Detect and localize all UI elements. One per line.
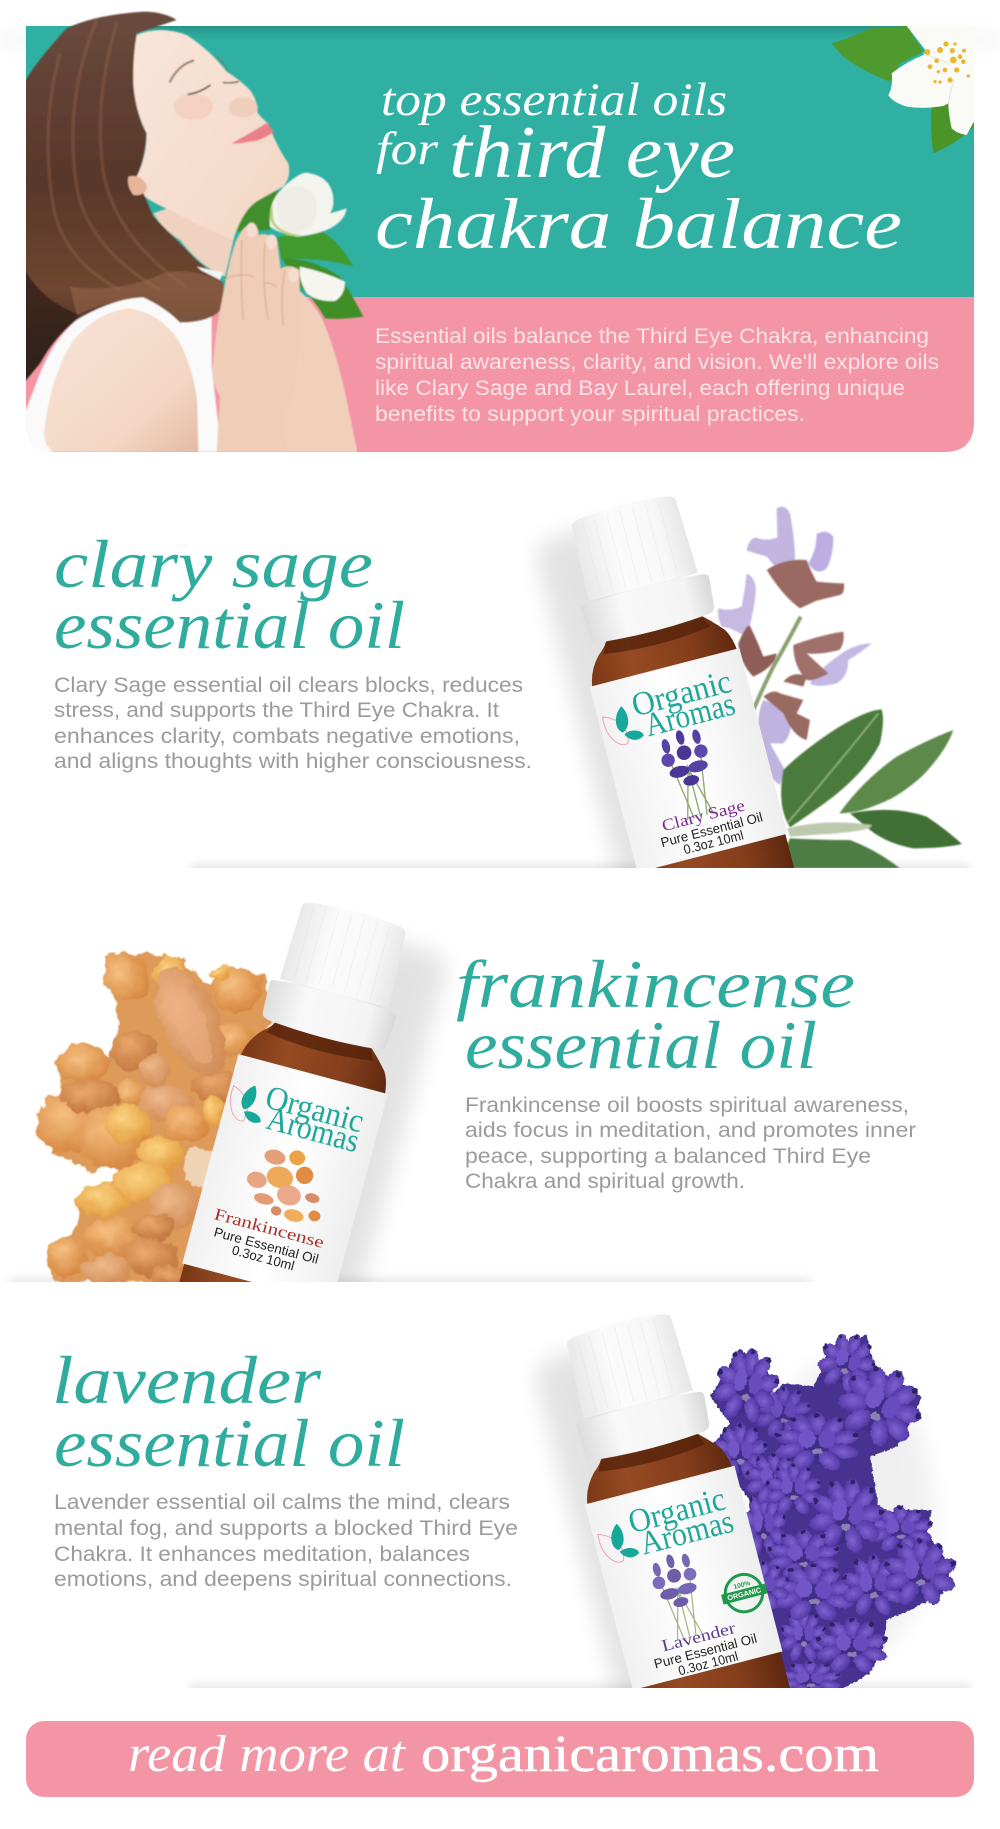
brand logo <box>602 706 644 746</box>
ear <box>128 176 147 195</box>
organic stamp: ORGANIC <box>726 1585 763 1603</box>
body text: frankincense: Frankincense oil boosts spiritual awareness, <box>465 1094 909 1117</box>
brand name: Organic <box>262 1079 368 1140</box>
heading: clary sage essential oil <box>54 526 405 663</box>
lavender flower spikes <box>707 1324 959 1699</box>
brand name: Organic <box>625 1481 729 1541</box>
bottle: clary sage <box>572 496 794 868</box>
petals <box>888 26 977 135</box>
cheek blush <box>173 93 213 120</box>
title <box>375 74 902 264</box>
lavender illustration with bottle <box>531 1303 959 1750</box>
banner text: read more at <box>128 1726 407 1783</box>
brand logo <box>225 1080 269 1126</box>
plant: sage flowers and leaves <box>718 507 962 868</box>
fingernails <box>246 223 298 282</box>
heading: frankincense essential oil: essential oil <box>465 1007 817 1083</box>
panel outer shadow <box>0 28 1000 52</box>
jasmine flower, top right <box>832 26 977 153</box>
product name: Lavender <box>660 1618 738 1655</box>
soft shadow behind flowers <box>753 1360 933 1667</box>
heading: lavender essential oil <box>52 1342 405 1481</box>
brand name line two: Aromas <box>263 1100 363 1160</box>
body text: lavender: Lavender essential oil calms the mind, clears <box>54 1491 510 1514</box>
shadow beside bottle <box>216 918 450 1310</box>
intro paragraph: spiritual awareness, clarity, and vision. We'll explore oils <box>375 351 939 374</box>
clary sage illustration with bottle <box>533 496 962 868</box>
body text: clary sage: Clary Sage essential oil clears blocks, reduces <box>54 674 523 697</box>
body text: clary sage: enhances clarity, combats negative emotions, <box>54 725 520 748</box>
heading: clary sage essential oil: essential oil <box>54 587 405 663</box>
floor shadow <box>9 1276 811 1282</box>
banner text: organicaromas.com <box>421 1726 879 1783</box>
product name: Clary Sage <box>660 796 747 835</box>
intro paragraph: Essential oils balance the Third Eye Chakra, enhancing <box>375 325 929 348</box>
banner text <box>128 1726 879 1783</box>
product volume: 0.3oz 10ml <box>230 1242 296 1273</box>
body text: clary sage: stress, and supports the Third Eye Chakra. It <box>54 699 499 722</box>
product type: Pure Essential Oil <box>652 1631 759 1672</box>
heading: frankincense essential oil: frankincense <box>456 946 855 1022</box>
lips <box>232 123 274 143</box>
organic stamp: 100% <box>733 1580 751 1591</box>
section: lavender <box>52 1303 970 1750</box>
heading: frankincense essential oil <box>456 946 855 1083</box>
brand name line two: Aromas <box>641 685 739 744</box>
section: clary sage <box>54 496 971 868</box>
brand name line two: Aromas <box>636 1503 737 1562</box>
floor shadow <box>190 1686 970 1694</box>
body text: lavender: emotions, and deepens spiritual connections. <box>54 1568 512 1591</box>
right arm <box>253 290 357 452</box>
product name: Frankincense <box>212 1204 326 1252</box>
lavender sprig on label <box>661 730 714 820</box>
intro paragraph <box>375 325 939 426</box>
lavender sprig on label <box>647 1549 711 1642</box>
leaves and buds behind the hand <box>237 173 363 319</box>
shadow behind bottle <box>531 1330 752 1718</box>
body text: lavender: mental fog, and supports a blocked Third Eye <box>54 1517 518 1540</box>
body text: frankincense: aids focus in meditation, and promotes inner <box>465 1119 916 1142</box>
bottle: frankincense <box>173 892 431 1339</box>
section: frankincense <box>9 902 916 1282</box>
neck <box>153 192 273 277</box>
body text: clary sage <box>54 674 532 773</box>
body text: lavender <box>54 1491 518 1591</box>
shadow behind bottle <box>533 528 684 868</box>
pink intro block <box>26 297 974 452</box>
title: third eye <box>449 112 735 194</box>
title: top essential oils <box>381 74 727 126</box>
hair highlight streaks <box>46 20 169 288</box>
banner background <box>26 1721 974 1797</box>
praying hands <box>212 223 301 452</box>
bottle: lavender <box>543 1303 798 1750</box>
teal title block <box>26 26 974 297</box>
lower label extension <box>182 1238 339 1303</box>
title: chakra balance <box>375 184 902 264</box>
finger creases <box>223 240 285 327</box>
body text: lavender: Chakra. It enhances meditation, balances <box>54 1543 470 1566</box>
leaf two <box>931 103 974 153</box>
body text: clary sage: and aligns thoughts with higher consciousness. <box>54 750 532 773</box>
body text: frankincense: Chakra and spiritual growth. <box>465 1170 745 1193</box>
panel: header banner <box>0 12 1000 452</box>
floor shadow <box>189 862 971 868</box>
title: for <box>376 123 439 175</box>
hair mass <box>23 12 223 383</box>
intro paragraph: benefits to support your spiritual practices. <box>375 403 805 426</box>
resin drawing on label <box>239 1140 336 1228</box>
nose shading <box>229 97 258 117</box>
top shadow on teal <box>150 26 974 40</box>
body text: frankincense <box>465 1094 916 1193</box>
product type: Pure Essential Oil <box>659 809 764 850</box>
stamens <box>924 41 970 84</box>
photo: woman with closed eyes <box>23 12 363 452</box>
white top <box>23 297 222 452</box>
bare shoulder <box>44 308 198 452</box>
resin tears <box>35 943 287 1288</box>
organic stamp <box>717 1569 771 1617</box>
call to action banner <box>26 1721 974 1797</box>
intro paragraph: like Clary Sage and Bay Laurel, each offering unique <box>375 377 905 400</box>
product type: Pure Essential Oil <box>212 1224 320 1267</box>
eyes and brows <box>170 57 238 94</box>
heading: clary sage essential oil: clary sage <box>54 526 373 602</box>
product volume: 0.3oz 10ml <box>677 1649 740 1678</box>
product volume: 0.3oz 10ml <box>682 827 745 857</box>
brand name: Organic <box>628 663 735 724</box>
heading: lavender essential oil: essential oil <box>54 1405 405 1481</box>
heading: lavender essential oil: lavender <box>52 1342 322 1418</box>
leaf one <box>832 26 923 82</box>
brand logo <box>596 1520 640 1566</box>
dark underside of hair <box>26 271 80 380</box>
body text: frankincense: peace, supporting a balanced Third Eye <box>465 1145 871 1168</box>
face <box>133 30 289 240</box>
frankincense illustration with bottle <box>35 892 450 1339</box>
